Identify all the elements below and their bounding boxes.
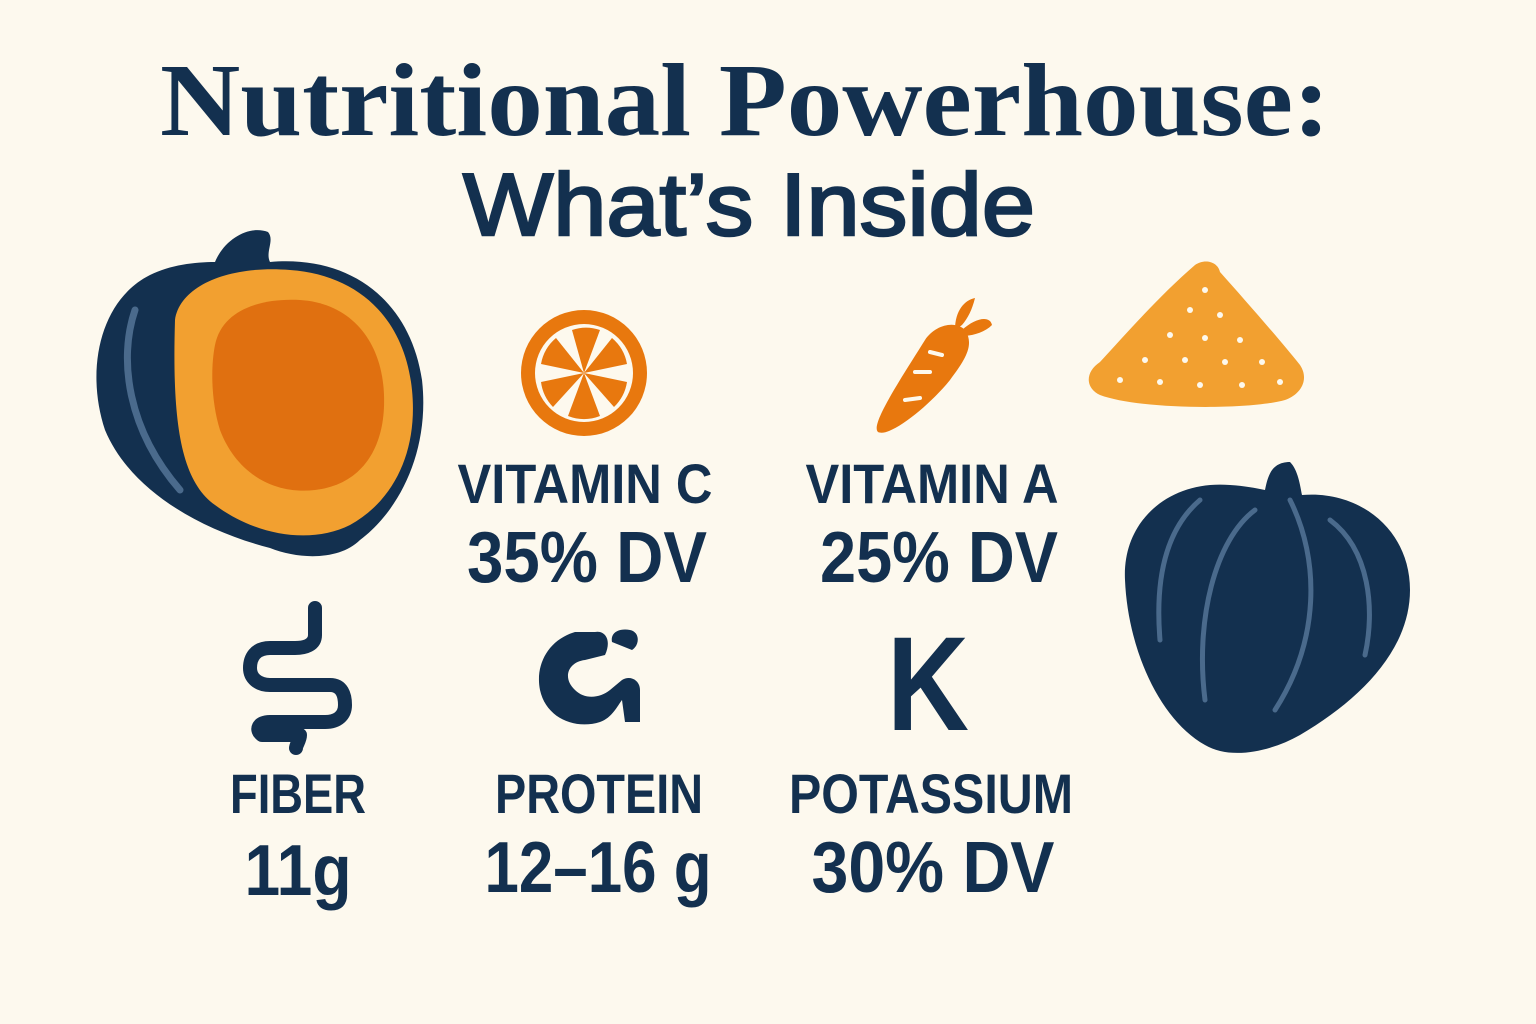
icon: intestine — [250, 608, 345, 748]
icon: carrot — [877, 298, 992, 433]
protein: 12–16 g — [484, 828, 712, 908]
potassium: POTASSIUM — [789, 762, 1073, 825]
icon: half acorn squash — [96, 230, 423, 556]
vitamin a: 25% DV — [820, 518, 1058, 598]
icon: stomach — [539, 630, 640, 724]
vitamin a: VITAMIN A — [806, 452, 1058, 515]
fiber: FIBER — [230, 762, 366, 825]
protein: PROTEIN — [495, 762, 703, 825]
protein — [484, 762, 712, 908]
icon: potassium K: K — [887, 610, 969, 759]
icon: orange slice — [521, 310, 647, 436]
icon: whole acorn squash — [1125, 462, 1410, 753]
potassium: 30% DV — [812, 828, 1054, 908]
fiber — [230, 762, 366, 911]
title — [160, 43, 1330, 254]
vitamin a — [806, 452, 1058, 598]
title: Nutritional Powerhouse: — [160, 43, 1330, 158]
vitamin c — [458, 452, 712, 598]
title: What’s Inside — [463, 155, 1035, 254]
icon: grain pile — [1089, 261, 1304, 407]
vitamin c: VITAMIN C — [458, 452, 712, 515]
fiber: 11g — [244, 831, 352, 911]
potassium — [789, 762, 1073, 908]
vitamin c: 35% DV — [467, 518, 707, 598]
